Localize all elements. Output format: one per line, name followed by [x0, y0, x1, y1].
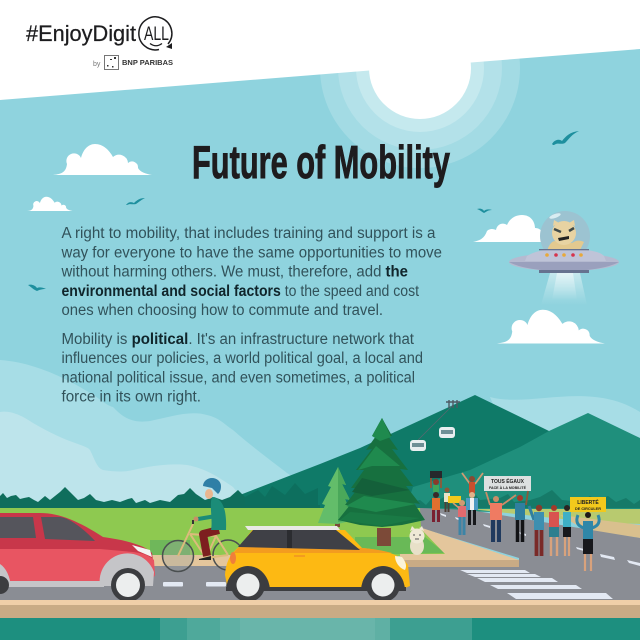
- paragraph 2: influences our policies, a world political goal, a local and: [62, 350, 423, 367]
- protester in blue top: [515, 491, 528, 542]
- sidewalk corner: [150, 527, 519, 567]
- sign: tous egaux: FACE À LA MOBILITÉ: [489, 485, 527, 490]
- logo: EnjoyDigitAll by BNP Paribas: #EnjoyDigit: [26, 21, 136, 46]
- logo: EnjoyDigitAll by BNP Paribas: [26, 17, 173, 70]
- paragraph 1: environmental and social factors to the speed and cost: [62, 283, 420, 300]
- paragraph 1: way for everyone to have the same opportunities to move: [61, 244, 442, 261]
- sign: liberte de circuler: LIBERTÉ: [577, 498, 599, 506]
- paragraph 1: [61, 225, 442, 319]
- protester with red trousers: [529, 505, 544, 556]
- small pine tree: [318, 467, 354, 527]
- protester with small yellow sign: [444, 488, 461, 512]
- cyclist on bicycle: [162, 478, 243, 572]
- cat sitting by tree: [410, 526, 424, 555]
- protester in red top and shorts: [549, 505, 559, 556]
- mountains: [200, 395, 640, 515]
- sign: liberte de circuler: DE CIRCULER: [575, 507, 601, 511]
- cable car gondolas: [410, 400, 460, 451]
- grass: [0, 508, 640, 556]
- paragraph 1: without harming others. We must, therefore, add the: [61, 264, 408, 280]
- road markings: [163, 513, 640, 599]
- white header band: [0, 0, 640, 100]
- bottom pavement: [0, 600, 640, 618]
- big pine tree: [338, 418, 425, 546]
- treeline: [0, 487, 640, 508]
- paragraph 2: [62, 331, 423, 406]
- sun halo rings: [320, 0, 520, 168]
- flying saucer with cat: [509, 211, 619, 305]
- road: [0, 508, 640, 602]
- paragraph 2: force in its own right.: [62, 389, 201, 406]
- protester in salmon top: [486, 492, 516, 542]
- right far sidewalk: [560, 515, 640, 538]
- logo: EnjoyDigitAll by BNP Paribas: by: [93, 61, 101, 68]
- birds: [28, 131, 579, 291]
- protester holding liberte sign: [577, 512, 599, 571]
- sign: tous egaux: TOUS ÉGAUX: [491, 477, 525, 485]
- bottom water band: [0, 618, 640, 640]
- protester with black sign: [430, 471, 442, 522]
- protesters on shoulders: [462, 473, 483, 525]
- sign: liberte de circuler: [570, 497, 606, 512]
- paragraph 2: national political issue, and even sometimes, a political: [62, 369, 415, 386]
- title: Future of Mobility: [192, 136, 450, 188]
- logo: EnjoyDigitAll by BNP Paribas: ALL: [144, 24, 169, 45]
- protester in pink top: [453, 500, 466, 535]
- clouds: [27, 144, 605, 344]
- paragraph 1: A right to mobility, that includes training and support is a: [62, 225, 436, 242]
- protesters group: [430, 471, 606, 571]
- sign: tous egaux: [484, 476, 531, 491]
- protester in cyan top and shorts: [563, 505, 571, 556]
- paragraph 1: ones when choosing how to commute and travel.: [62, 302, 383, 319]
- background haze hills: [0, 360, 640, 520]
- red car: [0, 513, 155, 602]
- yellow car: [225, 526, 410, 602]
- paragraph 2: Mobility is political. It's an infrastructure network that: [62, 331, 415, 348]
- sun: [369, 17, 471, 119]
- logo: EnjoyDigitAll by BNP Paribas: BNP PARIBAS: [122, 60, 173, 67]
